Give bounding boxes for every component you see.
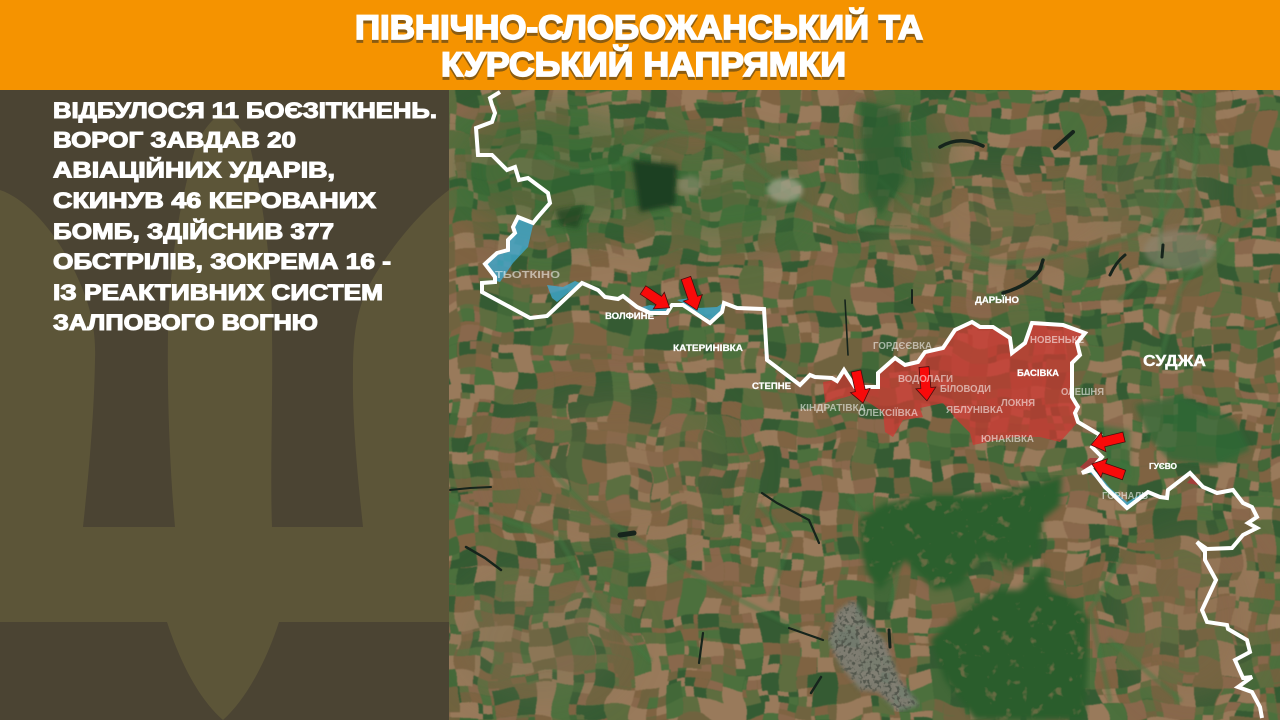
text block: summary: ІЗ РЕАКТИВНИХ СИСТЕМ bbox=[53, 280, 383, 305]
text block: summary: ВІДБУЛОСЯ 11 БОЄЗІТКНЕНЬ. bbox=[53, 98, 437, 123]
arrow: Oleksiivka bbox=[846, 369, 873, 405]
label: СТЕПНЕ bbox=[752, 381, 791, 392]
text block: summary bbox=[53, 98, 437, 335]
text block: summary: АВІАЦІЙНИХ УДАРІВ, bbox=[53, 158, 335, 182]
label: КАТЕРИНІВКА bbox=[673, 343, 743, 354]
map labels: settlements bbox=[495, 269, 1206, 502]
label: БІЛОВОДИ bbox=[940, 383, 991, 395]
label: Sudzha: СУДЖА bbox=[1143, 353, 1206, 370]
river valleys: green ribbons bbox=[450, 95, 1275, 700]
label: БАСІВКА bbox=[1017, 368, 1059, 379]
label: ДАРЬЇНО bbox=[975, 295, 1019, 306]
arrow: Volfyne west bbox=[637, 282, 675, 316]
forest: southern massif bbox=[858, 475, 1090, 720]
text block: summary: СКИНУВ 46 КЕРОВАНИХ bbox=[53, 188, 376, 213]
label: ЛОКНЯ bbox=[1001, 397, 1035, 409]
label: КІНДРАТІВКА bbox=[800, 402, 866, 414]
label: ГОРДЄЄВКА bbox=[873, 340, 932, 352]
panel: satellite map background bbox=[449, 90, 1280, 720]
regional tint bbox=[450, 100, 1255, 705]
label: ГУЄВО bbox=[1149, 462, 1177, 471]
panel: left summary with trident bbox=[0, 90, 449, 720]
arrow: Oleshnia south bbox=[1089, 427, 1126, 455]
header band bbox=[0, 0, 1280, 90]
attack arrows bbox=[637, 275, 1127, 484]
label: ВОДОЛАГИ bbox=[898, 373, 953, 385]
town spots bbox=[678, 176, 1216, 270]
title: КУРСЬКИЙ НАПРЯМКИ bbox=[441, 45, 846, 84]
front line: white border bbox=[476, 92, 1262, 718]
text block: summary: БОМБ, ЗДІЙСНИВ 377 bbox=[53, 219, 334, 244]
arrow: Volfyne east bbox=[677, 275, 707, 313]
occupied zone: red area bbox=[823, 322, 1198, 485]
arrow: Hornal bbox=[1089, 454, 1127, 484]
icon: trident watermark bbox=[0, 112, 449, 720]
title: ПІВНІЧНО-СЛОБОЖАНСЬКИЙ ТА bbox=[355, 8, 923, 47]
label: ОЛЕШНЯ bbox=[1061, 386, 1104, 398]
forest patches: Sudzha valley and north-west bbox=[555, 100, 1250, 478]
label: ЯБЛУНІВКА bbox=[946, 404, 1003, 416]
title bbox=[355, 8, 923, 84]
arrow: Vodolahy bbox=[914, 366, 937, 402]
text block: summary: ВОРОГ ЗАВДАВ 20 bbox=[53, 128, 296, 152]
label: ВОЛФИНЕ bbox=[605, 311, 654, 322]
contested zones: blue areas bbox=[485, 218, 1148, 508]
city: urban area bbox=[828, 600, 920, 712]
label: ГОРНАЛЬ bbox=[1102, 490, 1148, 502]
small red area: Huievo bbox=[1187, 477, 1198, 485]
label: ТЬОТКІНО bbox=[495, 269, 560, 281]
rivers and ponds bbox=[450, 132, 1163, 693]
label: НОВЕНЬКЕ bbox=[1030, 334, 1084, 346]
label: ОЛЕКСІЇВКА bbox=[858, 406, 918, 419]
text block: summary: ОБСТРІЛІВ, ЗОКРЕМА 16 - bbox=[53, 249, 391, 274]
label: ЮНАКІВКА bbox=[981, 433, 1034, 445]
small red area: Hornal bbox=[1080, 458, 1100, 470]
text block: summary: ЗАЛПОВОГО ВОГНЮ bbox=[53, 310, 318, 335]
